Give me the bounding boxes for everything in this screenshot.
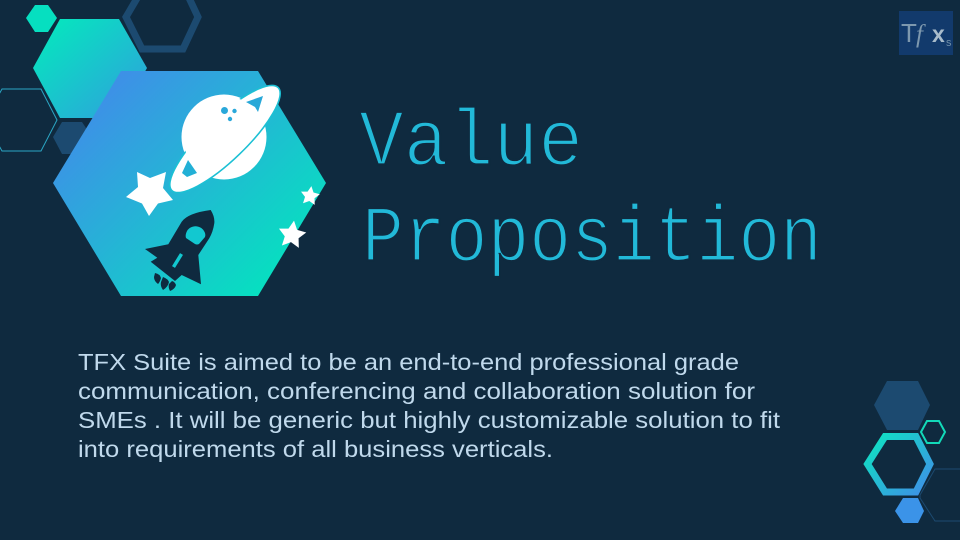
logo: TFXs: T bbox=[901, 18, 917, 48]
body text bbox=[78, 349, 781, 462]
body text: TFX Suite is aimed to be an end-to-end professional grade bbox=[78, 349, 739, 375]
hexagon: gradient ring bbox=[868, 436, 930, 492]
body text: into requirements of all business verticals. bbox=[78, 436, 553, 462]
logo: TFXs: f bbox=[916, 21, 926, 48]
logo: TFXs: x bbox=[932, 21, 945, 47]
hexagon: small teal bbox=[26, 5, 57, 32]
hexagon: navy filled bbox=[53, 122, 92, 154]
logo: TFXs: s bbox=[946, 37, 952, 49]
hexagon: teal gradient bbox=[33, 19, 147, 118]
decorative hexagons: bottom right bbox=[868, 381, 960, 523]
hexagon: small blue bbox=[895, 498, 924, 523]
title line: Value: Value bbox=[359, 98, 583, 190]
icon: large star bbox=[126, 172, 173, 216]
hexagon: thin outline right bbox=[920, 469, 960, 521]
title line: Proposition: Proposition bbox=[362, 194, 822, 286]
logo: TFXs bbox=[899, 11, 953, 55]
icon: rocket bbox=[145, 210, 214, 291]
body text: communication, conferencing and collaboration solution for bbox=[78, 378, 755, 404]
hexagon: thin outline left bbox=[0, 89, 57, 151]
title bbox=[359, 98, 822, 286]
hexagon: main gradient bbox=[53, 71, 326, 296]
icon: medium star right bbox=[277, 219, 308, 249]
body text: SMEs . It will be generic but highly customizable solution to fit bbox=[78, 407, 781, 433]
decorative hexagons: top left bbox=[0, 0, 198, 154]
hexagon: navy outline top bbox=[126, 0, 198, 49]
icon: ringed planet bbox=[157, 72, 293, 206]
hexagon: navy filled bbox=[874, 381, 930, 430]
icon: small star right bbox=[299, 185, 321, 205]
hexagon badge with space icons bbox=[53, 71, 326, 296]
hexagon: small teal outline bbox=[921, 421, 945, 443]
